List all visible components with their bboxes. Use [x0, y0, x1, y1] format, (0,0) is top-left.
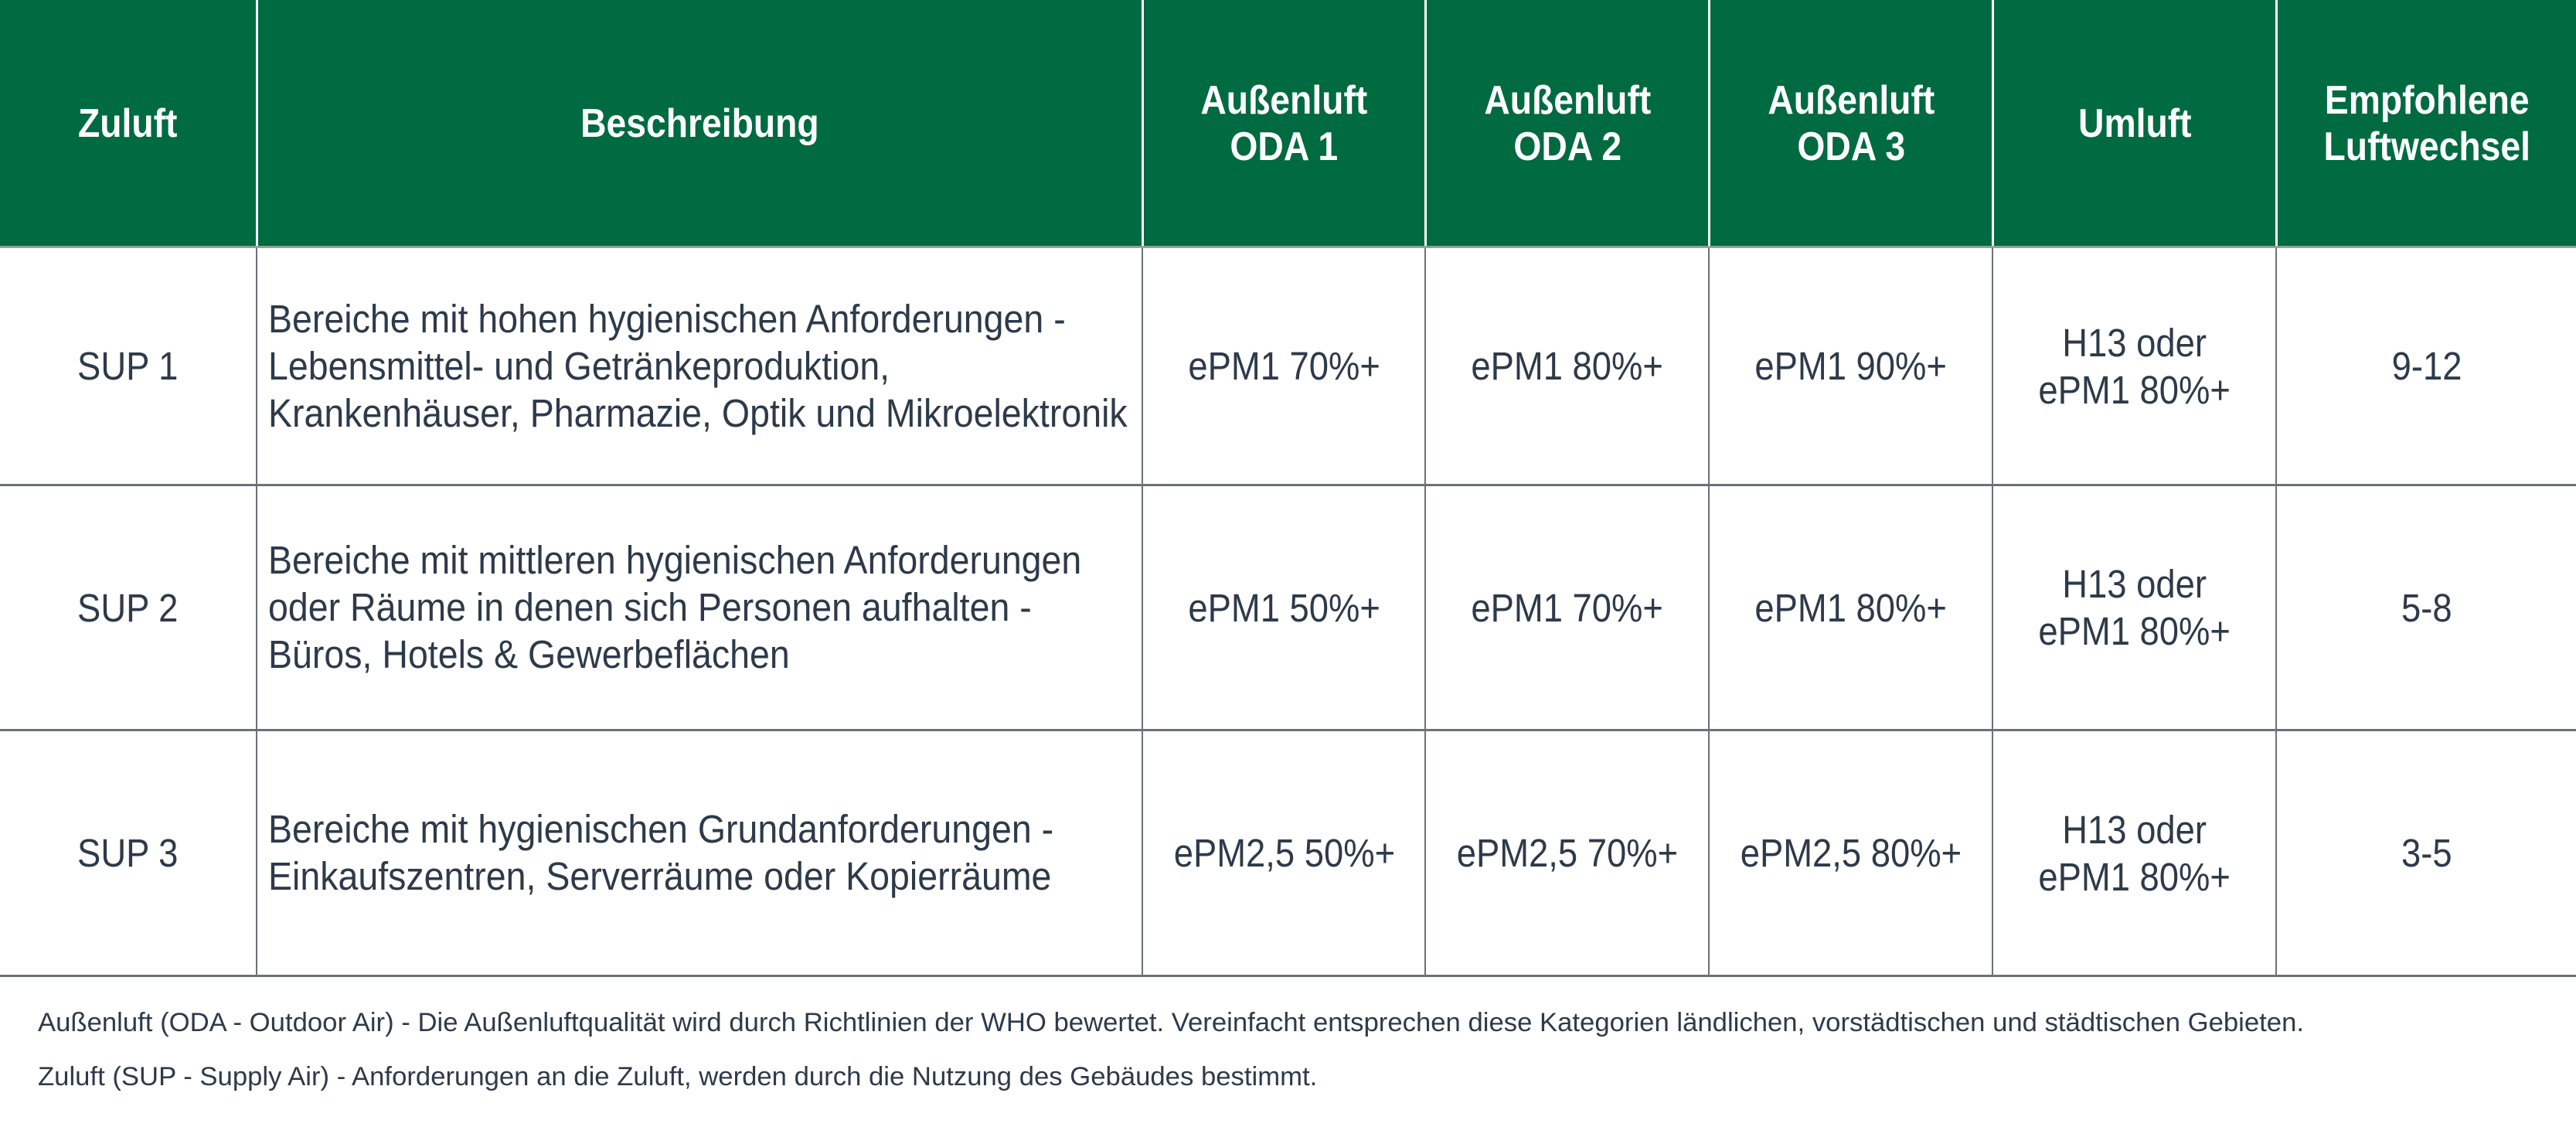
row SUP 3: SUP 3	[77, 831, 179, 875]
header: Beschreibung: Beschreibung	[580, 100, 818, 145]
text: Bereiche mit hygienischen Grundanforderungen -	[268, 807, 1053, 851]
text: Bereiche mit hohen hygienischen Anforderungen -	[268, 297, 1066, 341]
text: 9-12	[2392, 344, 2462, 388]
row SUP 1: SUP 1	[77, 344, 179, 388]
footnote ODA: Außenluft (ODA - Outdoor Air) - Die Außenluftqualität wird durch Richtlinien der WHO bewertet. Vereinfacht entsprechen diese Kategorien ländlichen, vorstädtischen und städtischen Gebieten.	[38, 1008, 2304, 1037]
header: Luftwechsel: Empfohlene	[2325, 77, 2529, 122]
header: ODA 2: ODA 2	[1513, 124, 1621, 169]
text: ePM1 70%+	[1188, 344, 1380, 388]
text: Krankenhäuser, Pharmazie, Optik und Mikroelektronik	[268, 391, 1128, 435]
text: H13 oder	[2063, 562, 2207, 606]
text: ePM2,5 70%+	[1457, 831, 1678, 875]
header: ODA 2: Außenluft	[1484, 77, 1651, 122]
text: ePM1 50%+	[1188, 586, 1380, 629]
text: H13 oder	[2063, 320, 2207, 365]
header: ODA 3: Außenluft	[1768, 77, 1935, 122]
text: Einkaufszentren, Serverräume oder Kopierräume	[268, 854, 1051, 898]
text: ePM2,5 80%+	[1741, 831, 1962, 875]
text: ePM1 80%+	[2039, 855, 2231, 898]
text: ePM1 80%+	[2039, 368, 2231, 411]
text: ePM1 80%+	[1755, 586, 1947, 629]
text: Bereiche mit mittleren hygienischen Anforderungen	[268, 538, 1081, 582]
text: ePM1 90%+	[1755, 344, 1947, 388]
text: Lebensmittel- und Getränkeproduktion,	[268, 344, 890, 388]
header: ODA 2	[1484, 77, 1651, 169]
text: Büros, Hotels & Gewerbeflächen	[268, 632, 790, 676]
header: ODA 1	[1201, 77, 1367, 169]
text: ePM1 70%+	[1472, 586, 1663, 629]
header: ODA 3: ODA 3	[1797, 124, 1905, 169]
text: ePM2,5 50%+	[1173, 831, 1395, 875]
header: Zuluft: Zuluft	[78, 100, 178, 145]
header: ODA 1: Außenluft	[1201, 77, 1367, 122]
text: H13 oder	[2063, 807, 2207, 852]
footnote SUP: Zuluft (SUP - Supply Air) - Anforderungen an die Zuluft, werden durch die Nutzung des Gebäudes bestimmt.	[38, 1062, 1317, 1091]
header: Luftwechsel: Luftwechsel	[2323, 124, 2530, 169]
text: ePM1 80%+	[2039, 609, 2231, 653]
text: oder Räume in denen sich Personen aufhalten -	[268, 585, 1032, 629]
header: Umluft: Umluft	[2078, 100, 2191, 145]
header: ODA 1: ODA 1	[1230, 124, 1338, 169]
text: 3-5	[2401, 831, 2452, 875]
header: Luftwechsel	[2323, 77, 2530, 169]
text: ePM1 80%+	[1472, 344, 1663, 388]
header band	[0, 0, 2576, 247]
text: 5-8	[2401, 586, 2452, 629]
row SUP 2: SUP 2	[77, 586, 179, 629]
header: ODA 3	[1768, 77, 1935, 169]
